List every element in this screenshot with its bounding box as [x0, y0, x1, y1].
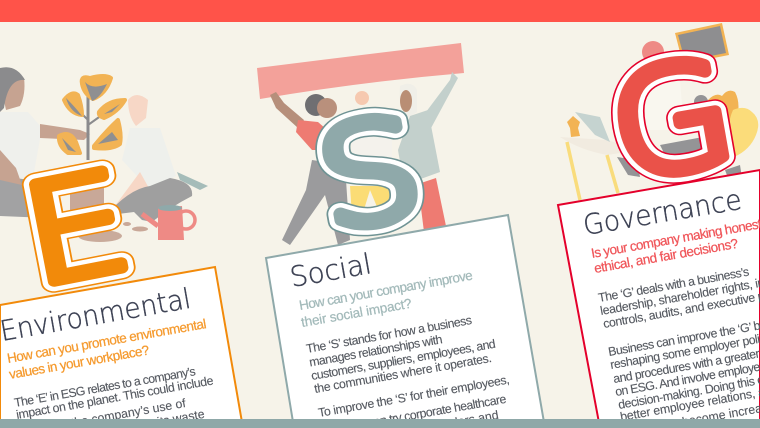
- illustration: volunteers planting: [0, 67, 208, 242]
- panel: Governance: [558, 28, 760, 428]
- heading: Environmental: Environmental: [0, 282, 193, 348]
- body: Social: the communities where it operates.: [313, 351, 493, 396]
- bottom banner: [0, 419, 760, 428]
- body: Social: [305, 313, 511, 428]
- letter S: S: [306, 87, 434, 263]
- body: Social: customers, suppliers, employees, and: [310, 337, 497, 383]
- letter G: G: [598, 28, 746, 214]
- panel card: [0, 267, 243, 428]
- illustration: office worker with chalkboard and plants: [560, 23, 758, 200]
- panel: Social: [266, 87, 545, 428]
- panel card: [266, 215, 545, 428]
- question: Social: How can your company improve: [298, 268, 474, 313]
- question: Governance: ethical, and fair decisions?: [593, 236, 739, 276]
- question: Environmental: values in your workplace?: [8, 343, 150, 382]
- question: Social: their social impact?: [300, 296, 413, 330]
- letter S: S: [306, 87, 434, 263]
- body: Social: To improve the ‘S’ for their employees,: [317, 372, 511, 420]
- letter E: E: [11, 143, 142, 317]
- letter E: E: [11, 143, 142, 317]
- letter G: G: [598, 28, 746, 214]
- body: Governance: [597, 265, 760, 428]
- body: Social: The ‘S’ stands for how a business: [305, 313, 473, 356]
- body: Environmental: The ‘E’ in ESG relates to a company’s: [13, 364, 197, 410]
- panel: Environmental: [0, 143, 243, 428]
- question: Environmental: How can you promote environmental: [6, 316, 207, 366]
- body: Environmental: impact on the planet. This could include: [15, 373, 215, 422]
- heading: Social: Social: [287, 247, 374, 294]
- letter E: E: [11, 143, 142, 317]
- body: Governance: The ‘G’ deals with a business’s: [597, 265, 750, 305]
- heading: Governance: Governance: [581, 183, 744, 242]
- letter G: G: [598, 28, 746, 214]
- panel card: [558, 170, 760, 428]
- letter S: S: [306, 87, 434, 263]
- illustration: people holding banner: [257, 43, 464, 245]
- body: Social: manages relationships with: [308, 332, 444, 369]
- top banner: [0, 0, 760, 22]
